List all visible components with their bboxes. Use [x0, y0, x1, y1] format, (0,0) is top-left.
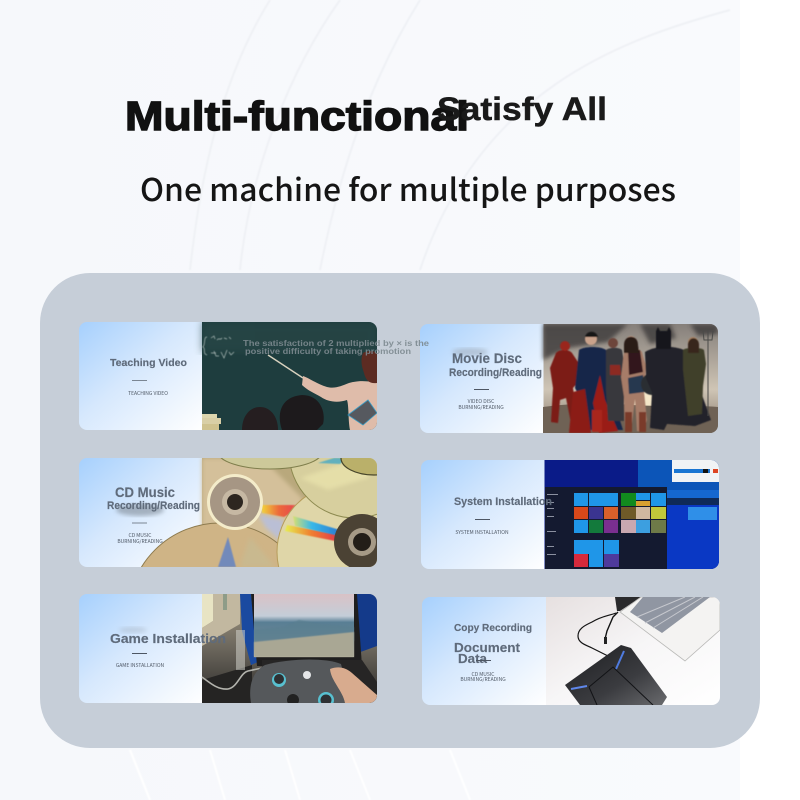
label: Document Data: Document	[454, 640, 521, 655]
caption: CD MUSIC BURNING/READING: BURNING/READING	[460, 676, 506, 683]
overlay caption text: positive difficulty of taking promotion	[245, 346, 411, 356]
label: Game Installation: Game Installation	[110, 631, 226, 646]
smudge	[116, 504, 164, 516]
caption: CD MUSIC BURNING/READING	[118, 533, 162, 544]
card: Teaching Video	[79, 322, 377, 430]
card: Game Installation	[79, 594, 377, 708]
card: Movie Disc	[420, 324, 718, 433]
card: System Installation	[421, 460, 720, 569]
subtitle: One machine for multiple purposes	[140, 165, 676, 210]
caption: VIDEO DISC BURNING/READING	[458, 399, 504, 410]
label: Movie Disc: Movie Disc	[452, 350, 522, 366]
panel: card container	[40, 273, 760, 748]
card: Copy Recording Document Data	[422, 597, 720, 705]
title: Multi-functional: Multi-functional	[125, 93, 469, 139]
label: Teaching Video: Teaching Video	[110, 357, 187, 369]
caption: VIDEO DISC BURNING/READING: VIDEO DISC	[468, 398, 494, 405]
caption: CD MUSIC BURNING/READING: CD MUSIC	[128, 532, 152, 539]
caption: SYSTEM INSTALLATION: SYSTEM INSTALLATION	[455, 529, 509, 536]
photo: external drive with laptop	[546, 597, 720, 705]
photo: superhero group	[543, 324, 718, 433]
card: CD Music	[79, 458, 377, 567]
label: Document Data	[454, 642, 520, 664]
photo: Windows start menu	[544, 460, 720, 569]
photo: teacher at chalkboard	[202, 322, 377, 430]
label: CD Music: CD Music	[115, 485, 175, 500]
label: Recording/Reading: Recording/Reading	[449, 367, 542, 379]
smudge	[119, 627, 147, 633]
label: Document Data: Data	[458, 651, 488, 666]
photo: compact discs	[141, 458, 377, 567]
label: Recording/Reading: Recording/Reading	[107, 500, 200, 512]
smudge	[452, 348, 488, 356]
photo: laptop and game controller	[202, 594, 377, 708]
caption: CD MUSIC BURNING/READING	[460, 672, 506, 682]
caption: TEACHING VIDEO: TEACHING VIDEO	[128, 390, 168, 397]
caption: CD MUSIC BURNING/READING: CD MUSIC	[472, 671, 494, 678]
caption: VIDEO DISC BURNING/READING: BURNING/READING	[458, 404, 504, 411]
caption: GAME INSTALLATION: GAME INSTALLATION	[116, 662, 165, 669]
label: System Installation: System Installation	[454, 496, 552, 508]
caption: CD MUSIC BURNING/READING: BURNING/READING	[117, 538, 163, 545]
overlay caption text: The satisfaction of 2 multiplied by × is the	[243, 338, 429, 348]
label: Copy Recording: Copy Recording	[454, 623, 532, 634]
overlay caption text	[243, 338, 429, 356]
title: Satisfy All: Satisfy All	[437, 91, 607, 127]
